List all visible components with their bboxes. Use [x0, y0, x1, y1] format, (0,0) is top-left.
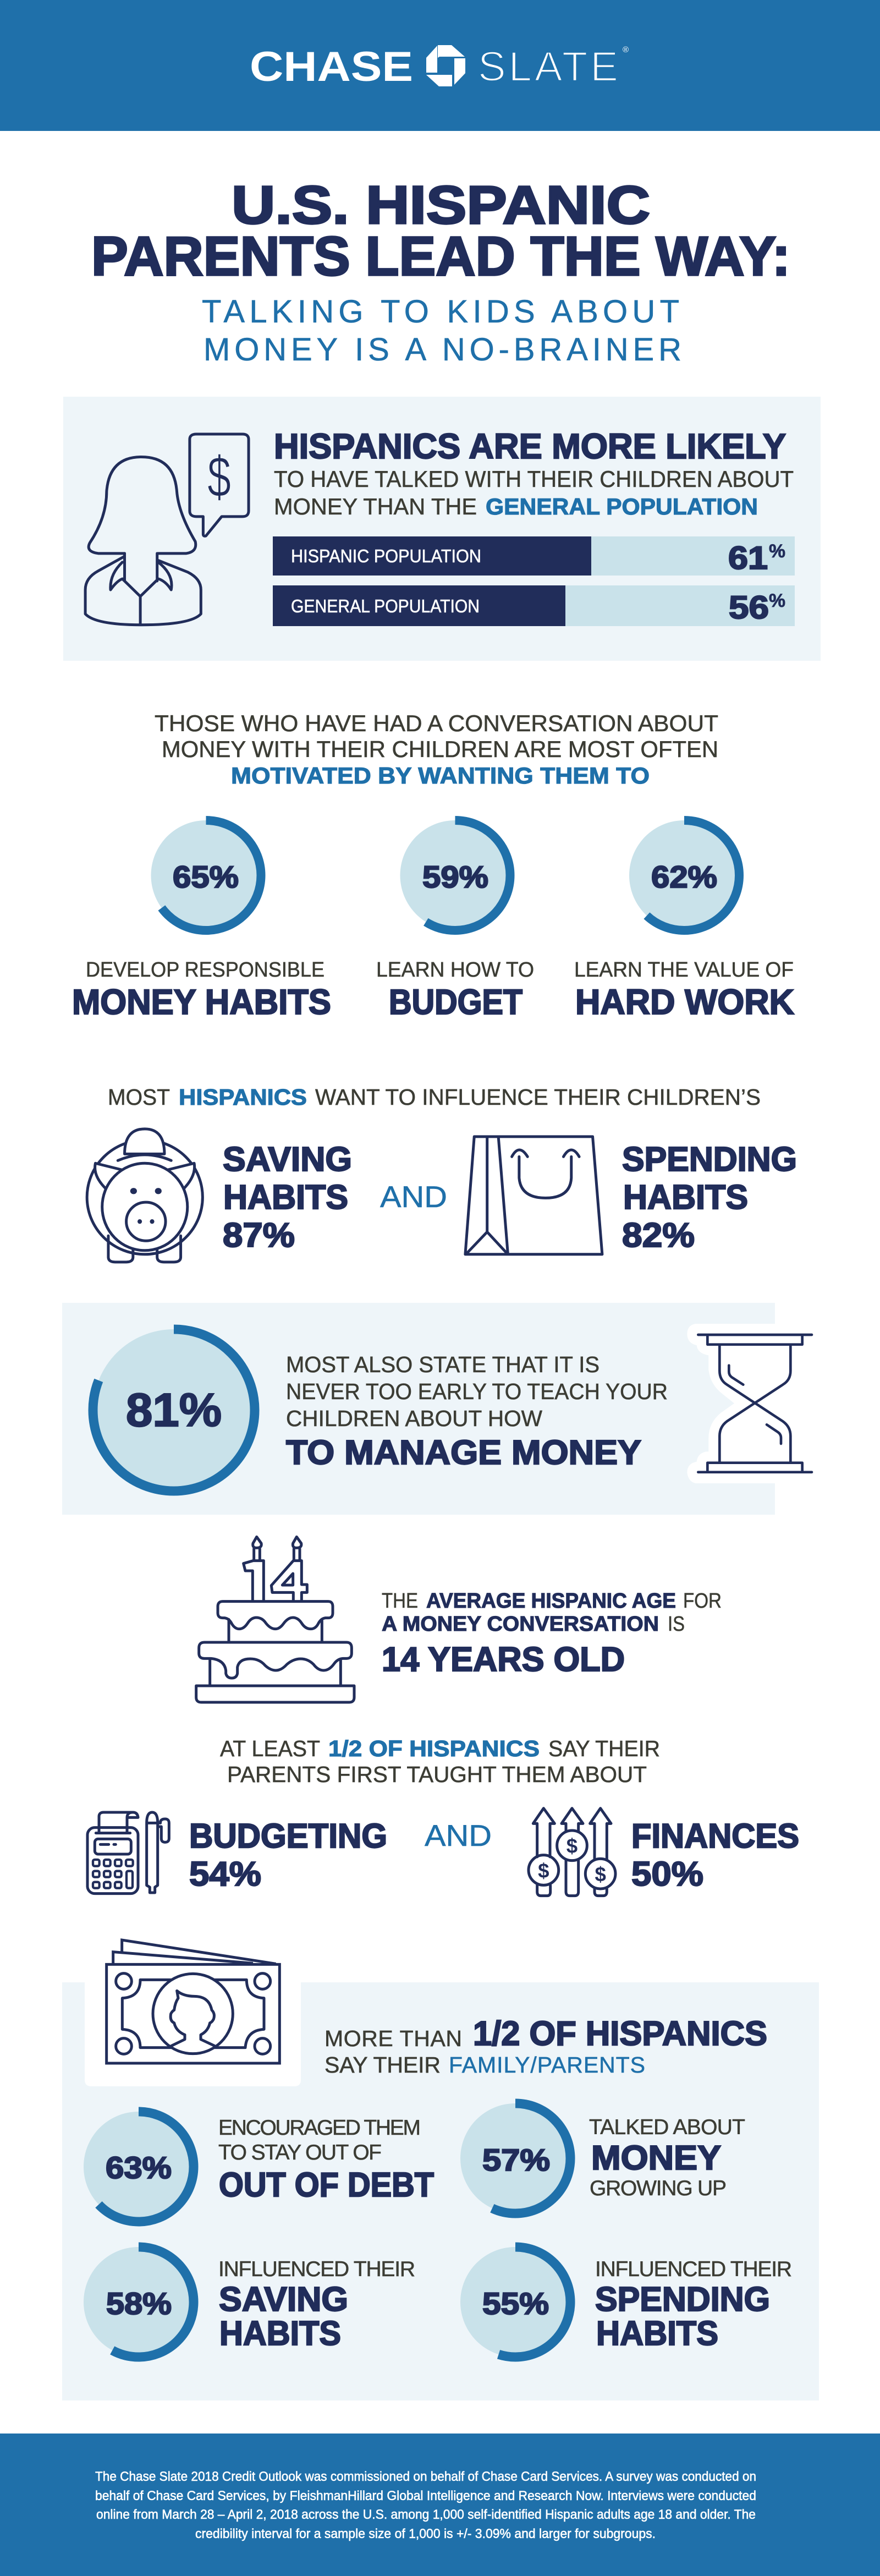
connector word: and: AND: [380, 1180, 447, 1214]
body text: GENERAL POPULATION: [486, 494, 758, 519]
body text: CHILDREN ABOUT HOW: [286, 1406, 542, 1431]
footer: methodology note: online from March 28 – April 2, 2018 across the U.S. among 1,000 self-identified Hispanic adults age 18 and older. The: [96, 2507, 756, 2522]
header banner with Chase Slate logo: [0, 0, 880, 131]
bar: Hispanic population 61%: [273, 536, 795, 576]
heading: 1/2 OF HISPANICS: [473, 2015, 767, 2053]
stat: 57% money growing up: 57%: [482, 2142, 550, 2177]
text: spending habits 82%: [622, 1141, 797, 1254]
registered mark: ®: [623, 45, 629, 54]
icon: rising arrows with dollar coins: $: [595, 1863, 606, 1886]
text: average age 14 years old: THE: [382, 1590, 418, 1613]
chart: 81% ring: 81%: [126, 1384, 222, 1437]
icon: rising arrows with dollar coins: [529, 1808, 615, 1896]
section intro: influence: MOST: [108, 1084, 170, 1110]
bar: Hispanic population 61%: 61: [728, 540, 768, 576]
icon: hourglass: [687, 1324, 812, 1483]
bar: general population 56%: 56: [729, 590, 769, 626]
icon: Chase octagon: [426, 45, 465, 86]
bar: general population 56%: %: [769, 590, 785, 611]
icon: calculator and pen: [87, 1812, 169, 1894]
bar: Hispanic population 61%: HISPANIC POPULATION: [291, 546, 481, 566]
section intro: motivations: [155, 710, 718, 788]
text: average age 14 years old: A MONEY CONVERSATION: [382, 1613, 659, 1636]
stat: 65% money habits: 65%: [173, 859, 239, 894]
stat: 63% out of debt: [84, 2112, 434, 2222]
text: budgeting 54%: BUDGETING: [189, 1817, 387, 1855]
panel: more likely: [63, 397, 821, 661]
heading: HISPANICS ARE MORE LIKELY: [274, 426, 786, 466]
icon: piggy bank: [87, 1129, 202, 1262]
body text: TO MANAGE MONEY: [286, 1434, 641, 1472]
body text: TO HAVE TALKED WITH THEIR CHILDREN ABOUT: [274, 466, 794, 492]
heading: FAMILY/PARENTS: [449, 2052, 645, 2078]
heading: SAY THEIR: [324, 2052, 441, 2078]
stat: 65% money habits: MONEY HABITS: [72, 982, 331, 1022]
stat: 63% out of debt: TO STAY OUT OF: [218, 2141, 382, 2164]
stat: 55% spending habits: INFLUENCED THEIR: [595, 2257, 792, 2281]
text: average age 14 years old: FOR: [683, 1590, 722, 1613]
bar: general population 56%: [273, 585, 795, 626]
stat: 63% out of debt: ENCOURAGED THEM: [218, 2116, 421, 2140]
text: spending habits 82%: HABITS: [623, 1179, 748, 1216]
text: saving habits 87%: [223, 1141, 352, 1254]
stat: 63% out of debt: OUT OF DEBT: [219, 2166, 434, 2204]
section intro: parents first taught: PARENTS FIRST TAUGHT THEM ABOUT: [227, 1762, 647, 1787]
stat: 62% hard work: LEARN THE VALUE OF: [574, 958, 794, 982]
stat: 55% spending habits: HABITS: [596, 2315, 718, 2353]
chart: 81% ring: [93, 1329, 255, 1491]
text: average age 14 years old: IS: [668, 1613, 685, 1636]
subtitle: [202, 294, 681, 368]
stat: 55% spending habits: [460, 2247, 792, 2357]
section intro: parents first taught: SAY THEIR: [548, 1736, 660, 1761]
stat: 58% saving habits: HABITS: [219, 2315, 341, 2353]
stat: 55% spending habits: SPENDING: [595, 2281, 770, 2319]
stat: 63% out of debt: 63%: [106, 2150, 172, 2185]
bar: Hispanic population 61%: %: [769, 541, 785, 562]
text: finances 50%: FINANCES: [631, 1817, 799, 1855]
body text: [274, 466, 794, 519]
heading: [324, 2015, 767, 2078]
title: PARENTS LEAD THE WAY:: [91, 226, 790, 287]
text: saving habits 87%: SAVING: [223, 1141, 352, 1179]
stat: 57% money growing up: [460, 2103, 745, 2213]
panel: never too early: [62, 1303, 812, 1515]
logo wordmark: SLATE: SLATE: [478, 43, 618, 90]
text: budgeting 54%: [189, 1817, 387, 1893]
footer: methodology note: The Chase Slate 2018 Credit Outlook was commissioned on behalf of Chase Card Services. A survey was conducted on: [95, 2469, 756, 2484]
section intro: motivations: MOTIVATED BY WANTING THEM TO: [231, 763, 650, 788]
section intro: motivations: MONEY WITH THEIR CHILDREN ARE MOST OFTEN: [162, 736, 718, 762]
footer: methodology note: [0, 2434, 880, 2576]
section intro: influence: HISPANICS: [179, 1084, 307, 1110]
body text: [286, 1352, 668, 1472]
section intro: parents first taught: AT LEAST: [220, 1736, 320, 1761]
section intro: motivations: THOSE WHO HAVE HAD A CONVERSATION ABOUT: [155, 710, 718, 736]
stat: 65% money habits: DEVELOP RESPONSIBLE: [86, 958, 324, 982]
connector word: and: AND: [425, 1818, 492, 1852]
body text: MONEY THAN THE: [274, 494, 477, 519]
logo wordmark: CHASE: CHASE: [250, 43, 413, 90]
stat: 58% saving habits: 58%: [106, 2286, 172, 2321]
footer: methodology note: credibility interval for a sample size of 1,000 is +/- 3.09% and larger for subgroups.: [195, 2526, 656, 2541]
icon: woman with speech bubble: [85, 434, 249, 625]
text: average age 14 years old: [382, 1590, 722, 1679]
icon: rising arrows with dollar coins: $: [566, 1835, 578, 1857]
stat: 65% money habits: [72, 820, 331, 1022]
stat: 58% saving habits: INFLUENCED THEIR: [218, 2257, 415, 2281]
subtitle: MONEY IS A NO-BRAINER: [204, 332, 681, 368]
body text: MOST ALSO STATE THAT IT IS: [286, 1352, 600, 1377]
panel: family and parents: [62, 1940, 819, 2400]
icon: shopping bag: [465, 1137, 602, 1254]
section intro: influence: [108, 1084, 761, 1110]
body text: NEVER TOO EARLY TO TEACH YOUR: [286, 1379, 668, 1404]
text: saving habits 87%: 87%: [223, 1216, 295, 1254]
section intro: influence: WANT TO INFLUENCE THEIR CHILDREN’S: [315, 1084, 761, 1110]
title: U.S. HISPANIC: [232, 175, 650, 235]
section intro: parents first taught: [220, 1736, 660, 1787]
text: average age 14 years old: 14 YEARS OLD: [382, 1641, 625, 1679]
text: saving habits 87%: HABITS: [223, 1179, 348, 1216]
stat: 58% saving habits: [84, 2247, 415, 2357]
stat: 57% money growing up: TALKED ABOUT: [589, 2115, 745, 2139]
text: spending habits 82%: SPENDING: [622, 1141, 797, 1179]
icon: rising arrows with dollar coins: $: [538, 1859, 549, 1882]
stat: 58% saving habits: SAVING: [219, 2281, 348, 2319]
stat: 62% hard work: [574, 820, 794, 1022]
subtitle: TALKING TO KIDS ABOUT: [202, 294, 679, 330]
icon: dollar bills: [107, 1940, 279, 2063]
stat: 57% money growing up: GROWING UP: [590, 2177, 727, 2200]
stat: 59% budget: [376, 820, 534, 1022]
stat: 62% hard work: 62%: [651, 859, 717, 894]
stat: 59% budget: LEARN HOW TO: [376, 958, 534, 982]
footer: methodology note: behalf of Chase Card Services, by FleishmanHillard Global Intelligence and Research Now. Interviews were conducted: [95, 2489, 756, 2503]
icon: dollar sign: $: [207, 445, 231, 509]
stat: 62% hard work: HARD WORK: [575, 982, 794, 1022]
text: budgeting 54%: 54%: [189, 1855, 261, 1893]
stat: 55% spending habits: 55%: [482, 2286, 549, 2321]
bar: general population 56%: GENERAL POPULATION: [291, 596, 480, 616]
title: [91, 175, 790, 287]
stat: 57% money growing up: MONEY: [591, 2139, 721, 2177]
stat: 59% budget: 59%: [422, 859, 488, 894]
stat: 59% budget: BUDGET: [389, 982, 522, 1022]
text: finances 50%: 50%: [631, 1855, 703, 1893]
text: finances 50%: [631, 1817, 799, 1893]
heading: MORE THAN: [324, 2026, 462, 2051]
text: spending habits 82%: 82%: [622, 1216, 695, 1254]
section intro: parents first taught: 1/2 OF HISPANICS: [328, 1736, 540, 1761]
icon: birthday cake with 14 candles: [196, 1537, 354, 1702]
text: average age 14 years old: AVERAGE HISPANIC AGE: [426, 1590, 676, 1613]
